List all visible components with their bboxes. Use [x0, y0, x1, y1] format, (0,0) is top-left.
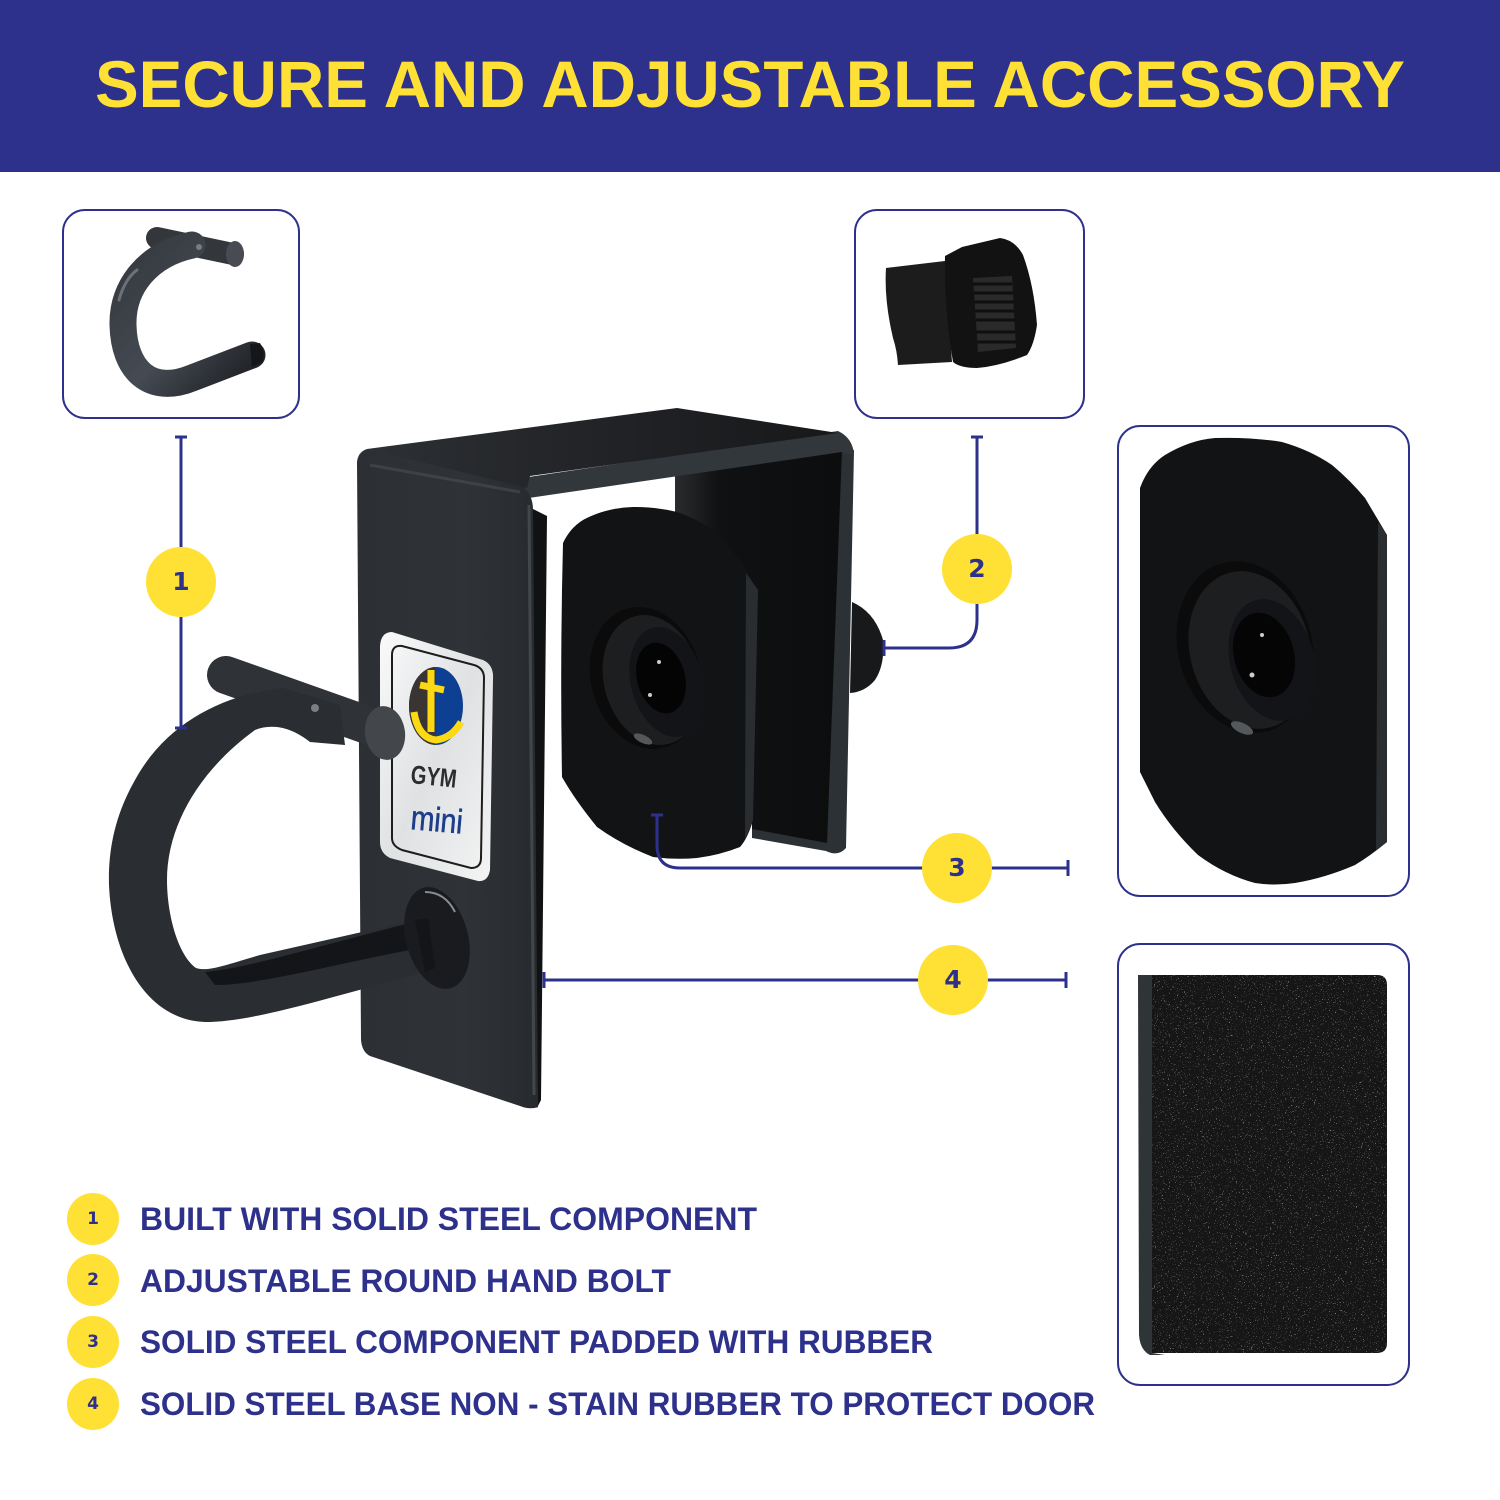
callout 3 connector [651, 815, 1068, 876]
legend item 1: BUILT WITH SOLID STEEL COMPONENT [140, 1201, 757, 1237]
top of the bracket [367, 408, 838, 488]
panel: non-stain rubber base detail [1118, 944, 1409, 1385]
callout 4 badge [918, 945, 988, 1015]
legend item 4 [67, 1378, 1095, 1430]
callout 4 connector [544, 972, 1066, 988]
underside band of the top [515, 431, 854, 500]
panel: hand bolt detail [855, 210, 1084, 418]
callout 2 connector [884, 437, 983, 656]
legend item 1: 1 [87, 1209, 99, 1229]
callout 3 badge: 3 [948, 853, 966, 882]
legend item 2: 2 [87, 1270, 99, 1290]
legend item 4: 4 [87, 1394, 99, 1414]
icon: rubber padded plate [1140, 438, 1387, 884]
inner edge strip [533, 509, 547, 1108]
back leg [675, 448, 846, 846]
panel: hook detail [63, 210, 299, 418]
header banner [0, 0, 1500, 172]
callout 1 badge: 1 [172, 567, 190, 596]
weld point [394, 880, 480, 996]
legend item 1 [67, 1193, 757, 1245]
callout 3 badge [922, 833, 992, 903]
hand bolt stub [850, 602, 883, 693]
icon: anchor logo [409, 667, 463, 745]
legend item 3: SOLID STEEL COMPONENT PADDED WITH RUBBER [140, 1324, 933, 1360]
callout 1 connector [175, 437, 187, 728]
legend item 3 [67, 1316, 933, 1368]
callout 4 badge: 4 [944, 965, 962, 994]
legend item 2 [67, 1254, 671, 1306]
brand sticker: GYM [409, 759, 458, 794]
icon: hand bolt [886, 238, 1037, 368]
rubber pad plate [561, 507, 758, 859]
brand sticker: mini [409, 799, 464, 842]
legend item 2: ADJUSTABLE ROUND HAND BOLT [140, 1263, 671, 1299]
icon: steel hook [119, 238, 264, 383]
callout 2 badge: 2 [968, 554, 986, 583]
right wall edge [752, 450, 854, 853]
panel: rubber pad detail [1118, 426, 1409, 896]
product: door anchor bracket [109, 408, 883, 1108]
title: SECURE AND ADJUSTABLE ACCESSORY [95, 47, 1405, 121]
front leg [357, 449, 538, 1108]
legend item 4: SOLID STEEL BASE NON - STAIN RUBBER TO PROTECT DOOR [140, 1386, 1095, 1422]
legend item 3: 3 [87, 1332, 99, 1352]
callout 1 badge [146, 547, 216, 617]
steel hook [109, 675, 480, 1022]
brand sticker [380, 632, 493, 881]
icon: rubber texture sheet [1138, 975, 1387, 1355]
callout 2 badge [942, 534, 1012, 604]
